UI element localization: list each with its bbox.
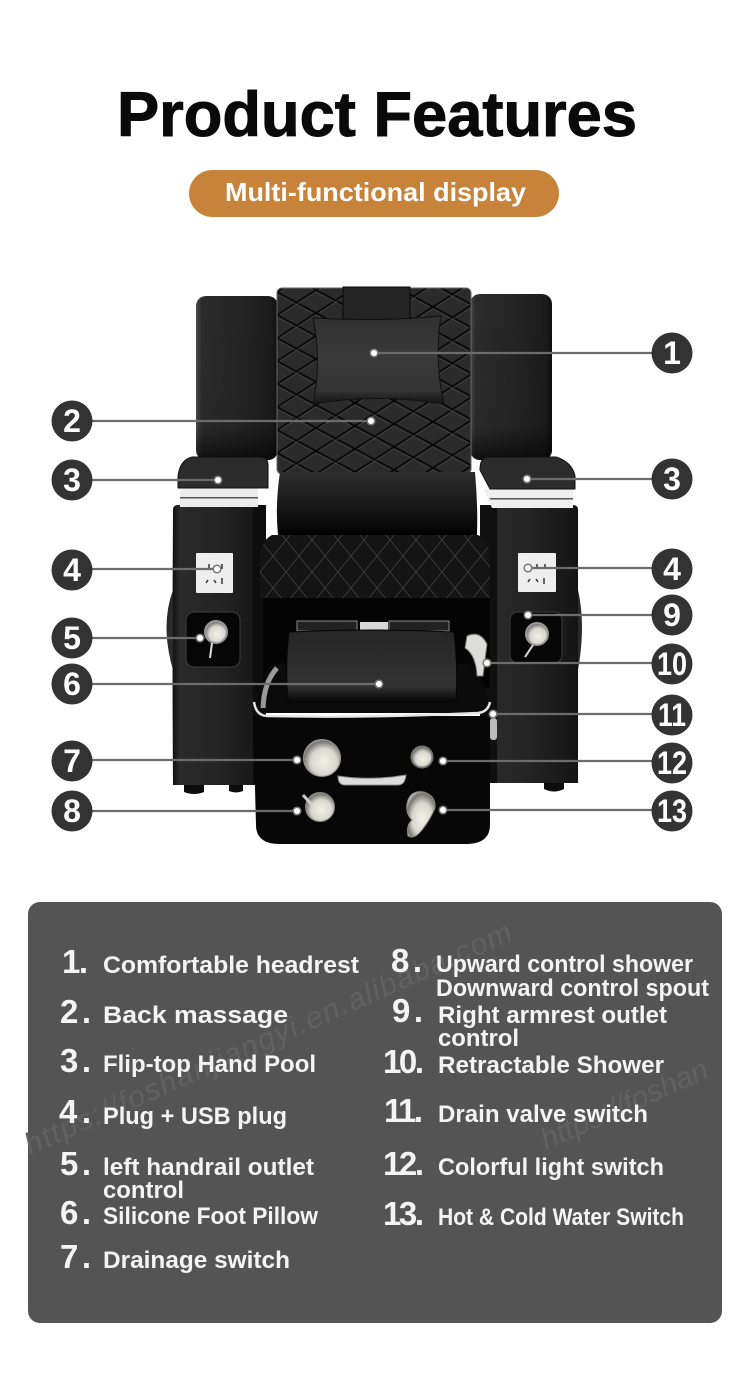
item 2 [60,993,288,1030]
basin handle [338,775,406,785]
item 5 [60,1145,314,1204]
hot and cold lever [407,792,435,837]
headrest pillow [313,316,444,404]
callout 7 left [52,740,92,782]
item 9 [392,992,667,1052]
item 7 [60,1238,290,1275]
callout 2 left: 2 [63,403,81,439]
callout 3 right: 3 [663,461,681,497]
callout 12 right: 12 [657,745,687,781]
item 4: Plug + USB plug [103,1103,287,1130]
item 6 [60,1194,318,1231]
left outlet recess [186,612,240,667]
left back wing [196,296,278,460]
product image: pedicure chair [166,287,582,844]
callout 5 left [52,618,92,658]
left socket holes [206,564,222,584]
drainage knob [304,740,340,776]
callout 8 left: 8 [63,793,81,829]
item 3 [60,1042,316,1079]
retractable shower handle [465,634,487,676]
item 9: control [438,1025,519,1052]
item 3: Flip-top Hand Pool [103,1051,316,1078]
item 8: Downward control spout [436,975,709,1002]
item 11 [384,1092,648,1129]
legend panel [19,902,722,1323]
callout leader lines and anchor dots [72,349,672,815]
right back wing [470,294,552,460]
callout 9 right [652,594,692,636]
callout 2 left [52,400,92,442]
item 13: Hot & Cold Water Switch [438,1204,684,1231]
subtitle pill [189,170,559,217]
item 8: 8. [391,942,422,979]
lumbar cushion [277,472,477,535]
basin lower body [253,716,490,844]
item 5: 5. [60,1145,91,1182]
callout 5 left: 5 [63,620,81,656]
callout 11 right: 11 [658,697,686,733]
item 10: 10. [383,1043,424,1080]
right armrest body [480,505,578,783]
callout 3 left: 3 [63,462,81,498]
callout 6 left: 6 [63,666,81,702]
left armrest top [178,457,268,488]
item 7: 7. [60,1238,91,1275]
callout 3 right [652,458,692,500]
callout 1 right: 1 [663,335,681,371]
item 6: 6. [60,1194,91,1231]
left armrest body [172,505,266,785]
item 2: 2. [60,993,91,1030]
item 4 [59,1093,287,1130]
right white trim [484,489,573,508]
shower control knob [303,792,334,822]
quilted seat [260,535,490,598]
item 2: Back massage [103,1002,288,1029]
callout 4 left: 4 [63,552,81,588]
item 9: 9. [392,992,423,1029]
item 5: left handrail outlet [103,1154,314,1181]
item 7: Drainage switch [103,1247,290,1274]
light switch [412,746,432,768]
left power socket [196,553,233,593]
subtitle pill: Multi-functional display [225,177,527,207]
item 12: Colorful light switch [438,1154,664,1181]
item 5: control [103,1177,184,1204]
left side bulge [166,590,173,670]
quilted backrest [277,288,471,474]
item 4: 4. [59,1093,91,1130]
callout 6 left [52,664,92,704]
item 1: 1. [62,943,88,980]
right outlet knob [525,623,548,657]
item 8 [391,942,709,1002]
callout 10 right: 10 [657,646,687,682]
right chair foot [544,783,564,792]
item 12 [383,1145,664,1182]
jets behind foot rest [297,621,449,632]
callout 4 left [52,550,92,590]
footwell cavity [263,598,490,688]
headrest strap [343,287,410,321]
callout 4 right [652,548,692,590]
item 13 [383,1195,684,1232]
right power socket [518,553,556,592]
item 8: Upward control shower [436,951,693,978]
item 11: 11. [384,1092,423,1129]
left outlet knob [205,621,227,658]
callout 7 left: 7 [63,743,81,779]
item 10 [383,1043,664,1080]
item 11: Drain valve switch [438,1101,648,1128]
side drain valve [490,718,497,740]
item 1 [62,943,359,980]
item 3: 3. [60,1042,91,1079]
foot pillow [287,630,457,702]
title: Product Features [117,80,637,150]
basin white trim [254,702,490,717]
right side bulge [578,590,582,670]
callout 4 right: 4 [663,551,681,587]
callout 8 left [52,790,92,832]
watermark: https://foshan [535,1053,713,1156]
item 10: Retractable Shower [438,1052,664,1079]
basin upper shell [256,664,489,713]
item 9: Right armrest outlet [438,1002,667,1029]
right outlet recess [510,612,562,663]
item 13: 13. [383,1195,424,1232]
callout 13 right: 13 [657,793,687,829]
callout 1 right [652,332,692,374]
item 12: 12. [383,1145,424,1182]
right socket holes [528,564,545,584]
right armrest top [480,457,575,489]
left chair feet [184,785,243,794]
item 6: Silicone Foot Pillow [103,1203,318,1230]
callout 3 left [52,460,92,500]
watermark: https://foshanjiangyi.en.alibaba.com [19,916,517,1161]
left white trim [180,488,258,507]
item 1: Comfortable headrest [103,952,359,979]
callout 9 right: 9 [663,597,681,633]
